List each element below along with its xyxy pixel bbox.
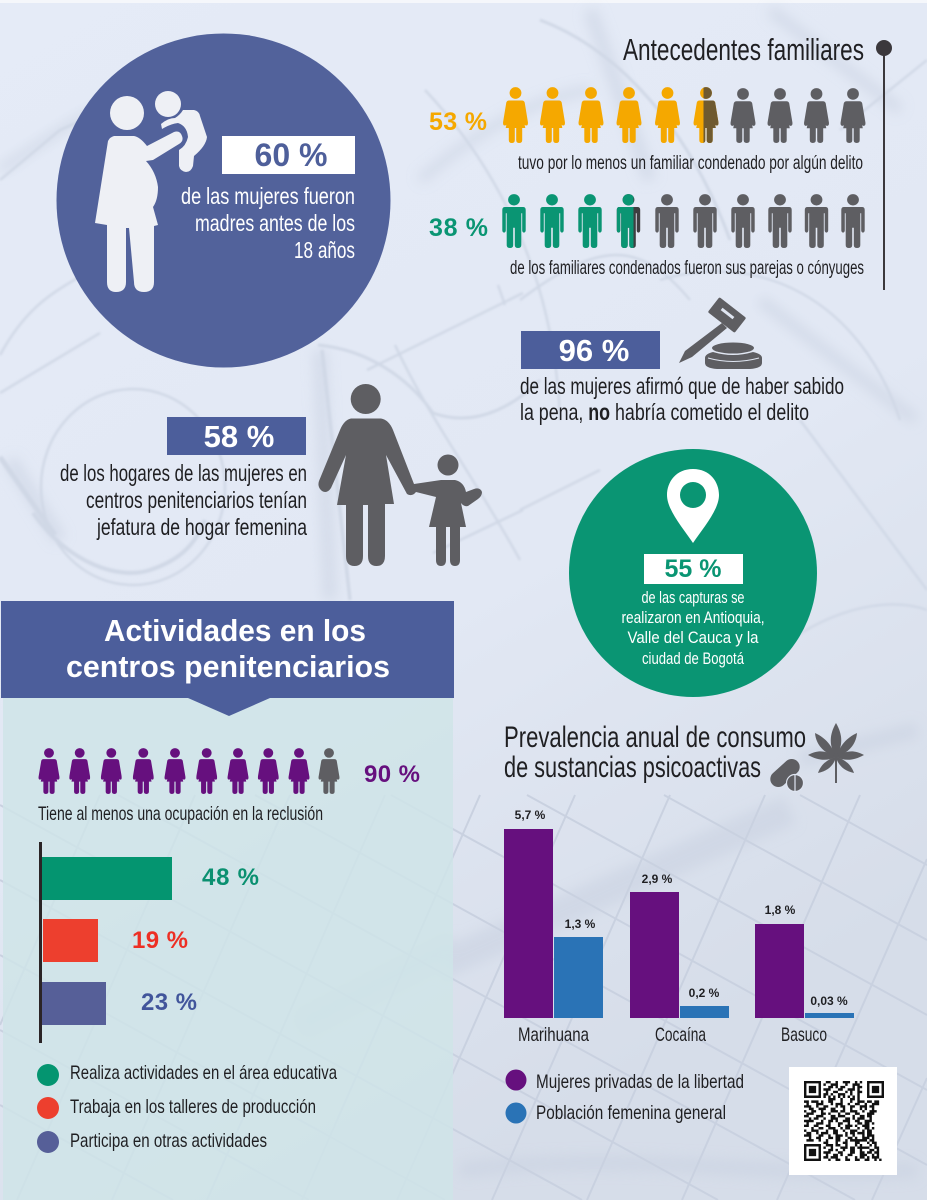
callout: 96 % bbox=[521, 331, 660, 369]
stat: 53 %: 53 % bbox=[429, 108, 487, 136]
panel: 96 % pena bbox=[520, 297, 844, 425]
panel: jefatura de hogar femenina bbox=[60, 384, 482, 566]
caption: ocupación: Tiene al menos una ocupación en la reclusión bbox=[38, 803, 323, 825]
bar chart: prevalencia: 0,2 % bbox=[689, 986, 720, 1000]
callout: 58 % bbox=[167, 417, 306, 455]
callout: 60 % bbox=[222, 136, 355, 174]
text: capturas: Valle del Cauca y la bbox=[628, 629, 759, 647]
text: jefatura: centros penitenciarios tenían bbox=[86, 487, 307, 513]
QR code bbox=[789, 1067, 897, 1175]
legend: actividades: Trabaja en los talleres de producción bbox=[70, 1096, 316, 1118]
panel: antecedentes familiares bbox=[429, 32, 892, 290]
bar chart: actividades: 19 % bbox=[132, 927, 188, 954]
banner heading: centros penitenciarios bbox=[66, 649, 390, 684]
heading: prevalencia: Prevalencia anual de consumo bbox=[504, 721, 806, 754]
banner heading bbox=[1, 601, 454, 716]
text: pena bbox=[520, 373, 844, 425]
text: capturas bbox=[622, 589, 764, 668]
bar chart: prevalencia: 1,8 % bbox=[765, 903, 796, 917]
text: capturas: realizaron en Antioquia, bbox=[622, 609, 764, 627]
text: jefatura: jefatura de hogar femenina bbox=[96, 514, 308, 540]
pictogram: mujeres 53 % bbox=[503, 87, 865, 143]
bar chart: prevalencia: 1,3 % bbox=[565, 917, 596, 931]
panel: prevalencia de consumo bbox=[504, 721, 864, 1124]
bar chart: prevalencia bbox=[504, 808, 854, 1046]
legend: prevalencia: Mujeres privadas de la libertad bbox=[536, 1071, 744, 1093]
callout: 96 %: 96 % bbox=[559, 333, 629, 368]
timeline line with dot bbox=[876, 40, 892, 290]
legend: actividades: Participa en otras actividades bbox=[70, 1130, 267, 1152]
banner heading: Actividades en los bbox=[104, 613, 366, 648]
icon: mazo de juez bbox=[679, 297, 762, 369]
callout: 58 %: 58 % bbox=[204, 419, 274, 454]
text: jefatura: de los hogares de las mujeres en bbox=[60, 460, 307, 486]
callout: 55 % bbox=[644, 554, 743, 584]
bar chart: prevalencia: Basuco bbox=[781, 1024, 827, 1046]
bar chart: actividades: 23 % bbox=[141, 989, 197, 1016]
bar chart: prevalencia: 5,7 % bbox=[515, 808, 546, 822]
icon: hoja bbox=[808, 723, 864, 783]
bar chart: prevalencia: Marihuana bbox=[518, 1024, 589, 1046]
legend: prevalencia: Población femenina general bbox=[536, 1102, 726, 1124]
bar chart: actividades: 48 % bbox=[202, 864, 259, 891]
text: madres antes de los 18 años: madres antes de los bbox=[195, 210, 355, 236]
icon: embarazada con bebé bbox=[95, 91, 207, 292]
text: madres antes de los 18 años: de las mujeres fueron bbox=[181, 183, 355, 209]
panel: madres antes de los 18 años bbox=[56, 34, 390, 368]
pictogram: hombres 38 % bbox=[502, 194, 865, 248]
text: jefatura bbox=[60, 460, 308, 540]
heading: prevalencia: de sustancias psicoactivas bbox=[504, 751, 761, 784]
stat: 38 %: 38 % bbox=[429, 214, 488, 242]
legend: prevalencia bbox=[506, 1070, 744, 1124]
panel: actividades en los centros penitenciarios bbox=[1, 601, 454, 1200]
bar chart: actividades bbox=[39, 842, 259, 1043]
text: capturas: de las capturas se bbox=[642, 589, 744, 607]
heading: prevalencia bbox=[504, 721, 806, 784]
legend: actividades: Realiza actividades en el área educativa bbox=[70, 1062, 337, 1084]
icon: madre e hija bbox=[318, 384, 482, 566]
text: capturas: ciudad de Bogotá bbox=[642, 650, 745, 668]
bar chart: prevalencia: 0,03 % bbox=[810, 994, 848, 1008]
pictogram: 90 % bbox=[39, 748, 339, 794]
panel: capturas bbox=[569, 449, 817, 697]
bar chart: prevalencia: Cocaína bbox=[655, 1024, 706, 1046]
legend: actividades bbox=[37, 1062, 337, 1153]
callout: 55 %: 55 % bbox=[665, 555, 721, 583]
icon: pastillas bbox=[767, 756, 804, 792]
stat: 90 %: 90 % bbox=[364, 761, 420, 788]
text: madres antes de los 18 años: 18 años bbox=[294, 237, 355, 263]
callout: 60 %: 60 % bbox=[255, 137, 327, 173]
text: madres antes de los 18 años bbox=[181, 183, 355, 263]
bar chart: prevalencia: 2,9 % bbox=[642, 872, 673, 886]
icon: pin de ubicación bbox=[667, 469, 719, 543]
text: pena: la pena, no habría cometido el delito bbox=[520, 399, 809, 425]
